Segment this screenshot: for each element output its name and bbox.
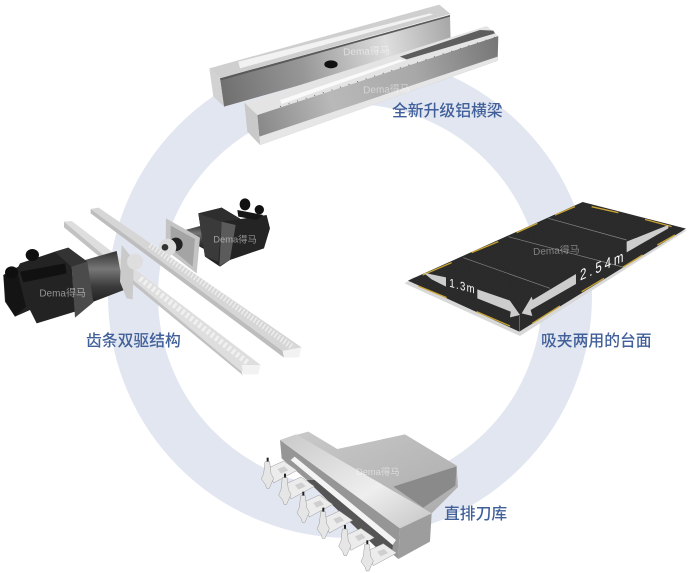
label: vacuum and clamp table: 吸夹两用的台面 <box>541 331 652 350</box>
table base <box>405 230 687 336</box>
label: straight tool magazine: 直排刀库 <box>444 505 507 523</box>
recessed tool bay <box>280 440 400 559</box>
front gear rack <box>64 221 261 375</box>
logo watermark: Dema得马 <box>356 466 400 477</box>
tool holders <box>261 458 397 571</box>
logo watermark: Dema得马 <box>343 45 390 58</box>
image: vacuum and clamp table <box>405 202 687 336</box>
rear housing <box>296 432 458 513</box>
shaded recess <box>393 466 457 508</box>
white rail <box>291 457 396 545</box>
crossbar end <box>398 513 432 559</box>
black grid surface <box>408 202 686 332</box>
logo watermark rear motor: Dema得马 <box>213 233 257 244</box>
front motor <box>3 245 143 323</box>
label: aluminium crossbeam: 全新升级铝横梁 <box>392 101 503 120</box>
logo watermark front beam: Dema得马 <box>363 83 410 96</box>
background ring <box>133 79 567 513</box>
front beam <box>244 26 498 145</box>
bright crossbar <box>280 434 432 528</box>
image: straight tool magazine <box>261 432 458 571</box>
length arrow lower segment <box>522 274 576 316</box>
yellow edge strips <box>418 207 675 326</box>
length arrow upper segment <box>627 225 668 252</box>
back beam <box>209 5 451 107</box>
rear motor <box>159 198 270 273</box>
width arrow right segment <box>477 289 520 317</box>
dimension 1.3m: 1.3m <box>449 277 476 297</box>
dimension 2.54m: 2.54m <box>580 246 626 284</box>
image: aluminium crossbeams <box>209 5 498 145</box>
image: rack and pinion dual drive <box>3 198 302 375</box>
lower dark rail <box>307 480 393 558</box>
logo watermark: Dema得马 <box>533 244 580 258</box>
rear gear rack <box>91 208 302 358</box>
label: rack dual drive: 齿条双驱结构 <box>86 332 181 350</box>
width arrow left segment <box>423 273 446 287</box>
grid division lines <box>463 218 627 332</box>
logo watermark front motor: Dema得马 <box>39 288 86 300</box>
